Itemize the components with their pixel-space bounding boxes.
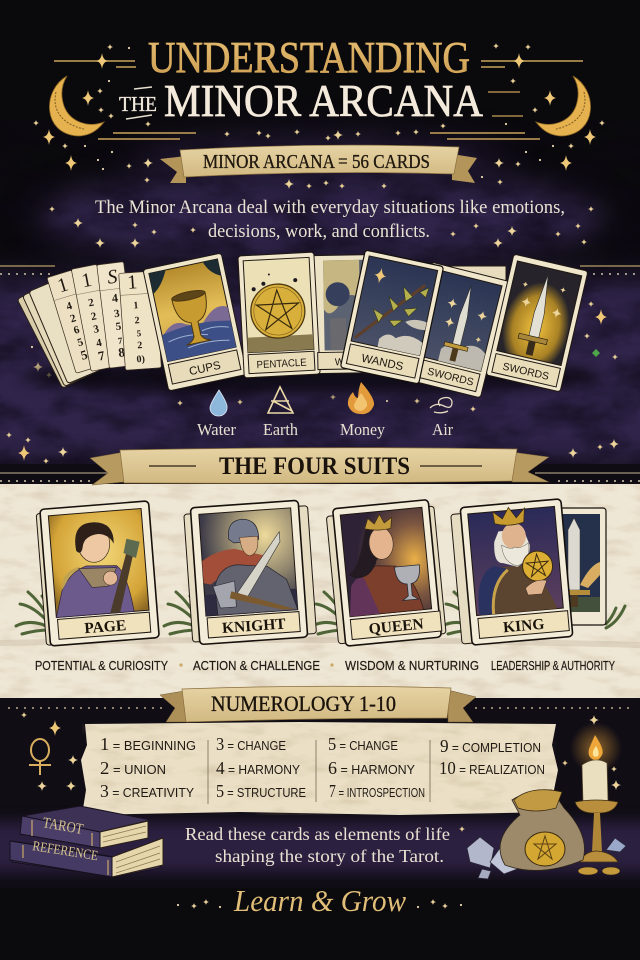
card strip two: 4	[95, 337, 103, 350]
card: cups	[143, 253, 247, 391]
table column 1	[100, 734, 196, 801]
card: swords one	[403, 262, 509, 398]
closing text: Read these cards as elements of life	[185, 824, 450, 844]
intro text	[95, 197, 565, 242]
banner text: THE FOUR SUITS	[219, 453, 410, 480]
table column 4: 10 = REALIZATION	[439, 758, 545, 778]
card: swords two	[486, 254, 588, 392]
card strip two: 2	[87, 297, 95, 309]
book: reference: REFERENCE	[31, 839, 99, 864]
panel: queen card	[326, 499, 446, 647]
card strip one: 1	[55, 273, 71, 297]
footer: learn and grow	[177, 883, 462, 918]
card strip three: 7	[117, 335, 123, 346]
table column 4: 9 = COMPLETION	[440, 736, 541, 756]
card strip one: 5	[76, 336, 85, 349]
title word: the: THE	[119, 92, 157, 116]
card: king's side sword	[557, 508, 606, 625]
card strip two: 2	[90, 310, 98, 323]
card strip four: 2	[134, 315, 140, 326]
card: pentacle	[238, 252, 320, 378]
book: tarot	[20, 806, 151, 848]
icon: gemstones	[467, 837, 626, 879]
captions: POTENTIAL & CURIOSITY	[35, 659, 169, 673]
closing text	[185, 824, 450, 866]
card label: WANDS	[360, 353, 405, 373]
title line: minor arcana: MINOR ARCANA	[164, 75, 483, 126]
banner: the four suits	[90, 448, 549, 485]
element labels: Air	[432, 420, 453, 439]
banner: 56 cards	[160, 145, 477, 183]
card strip two: 3	[92, 323, 101, 336]
starfield	[6, 43, 621, 832]
card strip one: 5	[79, 346, 90, 363]
panel: four suits cream section	[0, 473, 640, 698]
card: partly hidden wands	[316, 259, 385, 370]
section rule: lower	[8, 707, 632, 709]
banner text: MINOR ARCANA = 56 CARDS	[203, 151, 430, 173]
card strip three: S	[106, 266, 119, 289]
card strip four: 1	[127, 271, 138, 294]
card label: WA	[335, 357, 351, 368]
table column 4	[439, 736, 545, 778]
back card top right	[444, 266, 506, 306]
card strip four: 2	[137, 340, 143, 351]
banner text: NUMEROLOGY 1-10	[211, 691, 396, 716]
card label: PENTACLE	[256, 357, 307, 371]
intro text: The Minor Arcana deal with everyday situations like emotions,	[95, 197, 565, 218]
icon: fire	[348, 382, 374, 414]
table column 3: 6 = HARMONY	[328, 758, 416, 778]
icon: ankh	[29, 739, 51, 775]
cards row shadow	[20, 358, 600, 394]
card strip three	[97, 262, 136, 368]
icon: book stack	[10, 806, 163, 877]
table column 3	[328, 734, 425, 801]
element labels: Water	[197, 420, 236, 439]
book: tarot: TAROT	[41, 815, 84, 838]
card label: SWORDS	[501, 361, 550, 383]
table column 1: 3 = CREATIVITY	[100, 781, 195, 801]
element labels: Earth	[263, 420, 298, 439]
panel: king card	[450, 499, 573, 646]
captions: ACTION & CHALLENGE	[193, 659, 320, 673]
card label: KNIGHT	[221, 615, 287, 637]
card strip four: 1	[133, 300, 139, 311]
title	[119, 33, 483, 126]
card strip three: 4	[111, 291, 119, 305]
moon: left crescent	[49, 76, 104, 136]
card strip one: 4	[65, 300, 74, 313]
card strip two	[71, 264, 117, 371]
table dividers	[208, 740, 430, 804]
icon: earth triangle	[268, 387, 293, 413]
icon: air swirl	[430, 398, 452, 413]
table column 1: 1 = BEGINNING	[100, 734, 196, 754]
table column 2: 5 = STRUCTURE	[216, 781, 306, 801]
icon: coin bag	[500, 790, 620, 875]
card label: QUEEN	[368, 616, 424, 638]
card strip one: 2	[69, 312, 78, 325]
card label: PAGE	[84, 617, 127, 637]
back card behind wands	[311, 254, 389, 374]
table column 2: 4 = HARMONY	[216, 758, 301, 778]
intro text: decisions, work, and conflicts.	[208, 221, 430, 242]
book: reference	[10, 838, 163, 877]
card strip three: 5	[115, 320, 122, 333]
panel: page card	[36, 501, 159, 646]
footer text: Learn & Grow	[233, 883, 406, 918]
card strip one: 6	[72, 324, 81, 337]
table column 2	[216, 734, 306, 801]
card strip four: 0)	[136, 354, 145, 365]
panel: knight card	[183, 500, 317, 645]
card label: CUPS	[188, 360, 222, 378]
table column 1: 2 = UNION	[100, 758, 166, 778]
icon: water drop	[210, 390, 227, 416]
section rule: upper	[0, 266, 640, 274]
icon: candle	[570, 722, 622, 862]
table column 2: 3 = CHANGE	[216, 734, 286, 754]
captions	[35, 659, 615, 673]
card strip one	[47, 270, 101, 373]
moon: right crescent	[536, 76, 591, 136]
card strip three: 8	[117, 344, 126, 360]
card strip four: 5	[136, 328, 142, 338]
top ornament lines	[54, 53, 583, 139]
captions: WISDOM & NURTURING	[345, 659, 479, 673]
closing text: shaping the story of the Tarot.	[215, 846, 444, 866]
table column 3: 5 = CHANGE	[328, 734, 398, 754]
card label: KING	[502, 616, 545, 636]
panel: numerology table	[81, 722, 558, 815]
card strip two: 1	[80, 269, 94, 292]
card strip three: 3	[113, 308, 121, 320]
title line: understanding: UNDERSTANDING	[148, 33, 470, 82]
table column 3: 7 = INTROSPECTION	[329, 781, 425, 801]
card strip four	[119, 270, 161, 370]
grass clumps	[16, 592, 625, 634]
card: wands	[340, 250, 444, 384]
element labels	[197, 420, 453, 439]
element labels: Money	[340, 420, 385, 439]
banner: numerology	[160, 686, 476, 722]
card strip two: 7	[97, 348, 106, 364]
card label: SWORDS	[426, 366, 475, 389]
number cards fan	[17, 262, 161, 388]
